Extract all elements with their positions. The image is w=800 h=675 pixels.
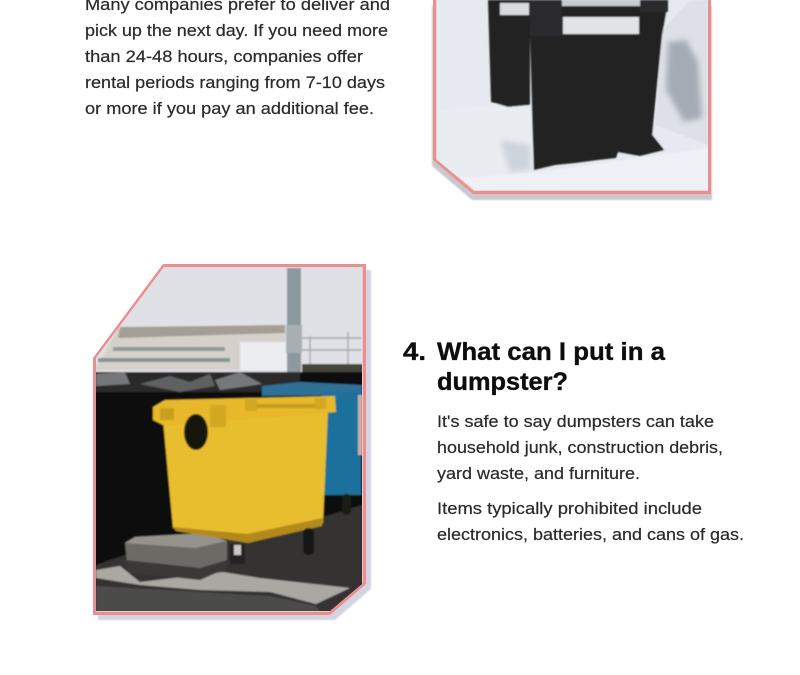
text block: prohibited items: electronics, batteries, and cans of gas. [437, 526, 744, 544]
text block: rental period explanation: rental periods ranging from 7-10 days [85, 74, 385, 92]
text block: what dumpsters can take: household junk, construction debris, [437, 439, 723, 457]
text block: rental period explanation: than 24-48 hours, companies offer [85, 48, 364, 66]
text block: rental period explanation [85, 0, 390, 118]
text block: rental period explanation: or more if you pay an additional fee. [85, 100, 374, 118]
text block: what dumpsters can take: It's safe to say dumpsters can take [437, 413, 714, 431]
text block: prohibited items [437, 500, 744, 544]
text block: prohibited items: Items typically prohibited include [437, 500, 702, 518]
text block: what dumpsters can take: yard waste, and furniture. [437, 465, 640, 483]
heading: question 4: dumpster? [437, 368, 568, 396]
heading: question 4 [403, 338, 666, 396]
text block: rental period explanation: pick up the next day. If you need more [85, 22, 388, 40]
photo panel: yellow and blue dumpsters [90, 262, 371, 622]
photo panel: black bins in snow [430, 0, 715, 200]
text block: what dumpsters can take [437, 413, 723, 483]
heading: question 4: What can I put in a [437, 338, 666, 366]
heading: question 4: 4. [403, 338, 426, 366]
